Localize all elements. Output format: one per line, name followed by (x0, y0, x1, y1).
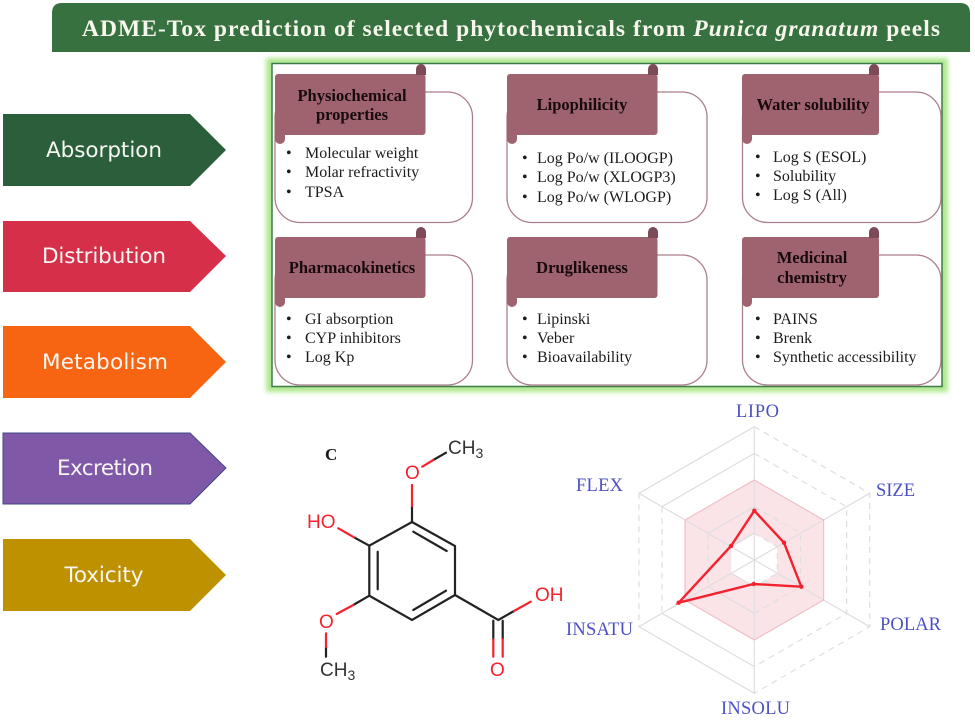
card: Lipophilicity: Lipophilicity (537, 95, 628, 114)
card: Physiochemical properties: Molar refractivity (305, 164, 419, 181)
arrow: Excretion: Excretion (57, 456, 153, 481)
arrow: Toxicity (3, 539, 226, 611)
title banner: ADME-Tox prediction of selected phytochemicals from Punica granatum peels (82, 16, 940, 42)
card: Physiochemical properties: Physiochemical (297, 86, 407, 105)
card: Druglikeness: Veber (537, 330, 575, 347)
card: Pharmacokinetics: • (286, 311, 292, 328)
radar grid (639, 427, 870, 693)
card: Druglikeness: Druglikeness (536, 258, 628, 277)
arrow: Metabolism (3, 326, 226, 398)
radar axis labels (566, 402, 942, 719)
radar axis labels: LIPO (736, 402, 779, 422)
chemical structure: syringic acid (307, 438, 564, 683)
chemical structure: syringic acid: 3 (347, 667, 355, 683)
card: Medicinal chemistry: Brenk (773, 330, 812, 347)
card: Druglikeness: Lipinski (537, 311, 591, 328)
card: Water solubility: • (755, 168, 761, 185)
card: Medicinal chemistry: Medicinal (777, 248, 848, 267)
arrow: Excretion (3, 433, 226, 504)
card: Pharmacokinetics: CYP inhibitors (305, 330, 401, 347)
chemical structure: syringic acid: O (405, 463, 420, 484)
arrow: Toxicity: Toxicity (64, 563, 144, 588)
card: Druglikeness: • (522, 311, 528, 328)
card: Pharmacokinetics (275, 227, 472, 385)
radar data line (676, 508, 804, 605)
panel label: C: C (325, 445, 337, 464)
card: Water solubility: Solubility (773, 168, 836, 185)
card: Medicinal chemistry (742, 227, 941, 385)
card: Water solubility: Water solubility (757, 95, 870, 114)
panel: ADME parameter categories (266, 58, 948, 392)
chemical structure: syringic acid: HO (307, 512, 336, 533)
card: Medicinal chemistry: chemistry (777, 268, 848, 287)
radar axis labels: SIZE (876, 481, 915, 501)
card: Physiochemical properties: • (286, 145, 292, 162)
card: Pharmacokinetics: Log Kp (305, 349, 354, 366)
card: Pharmacokinetics: • (286, 330, 292, 347)
card: Physiochemical properties: • (286, 164, 292, 181)
card: Water solubility: • (755, 149, 761, 166)
card: Medicinal chemistry: • (755, 349, 761, 366)
pink optimal zone (685, 480, 824, 640)
card: Lipophilicity: • (522, 150, 528, 167)
radar axis labels: INSOLU (721, 699, 790, 719)
radar axis labels: INSATU (566, 620, 633, 640)
arrow: Absorption (3, 114, 226, 186)
card: Lipophilicity: Log Po/w (WLOGP) (537, 189, 671, 206)
card: Water solubility: Log S (ESOL) (773, 149, 866, 166)
card: Lipophilicity: • (522, 169, 528, 186)
card: Physiochemical properties (275, 64, 472, 222)
chemical structure: syringic acid: 3 (475, 445, 483, 461)
radar axis labels: POLAR (880, 615, 942, 635)
card: Medicinal chemistry: • (755, 311, 761, 328)
card: Medicinal chemistry: • (755, 330, 761, 347)
arrow: Distribution (3, 221, 226, 292)
card: Lipophilicity: Log Po/w (ILOOGP) (537, 150, 673, 167)
chemical structure: syringic acid: O (490, 660, 505, 681)
card: Lipophilicity: • (522, 189, 528, 206)
card: Medicinal chemistry: PAINS (773, 311, 818, 328)
card: Physiochemical properties: • (286, 184, 292, 201)
card: Physiochemical properties: Molecular weight (305, 145, 419, 162)
radar axis labels: FLEX (576, 476, 624, 496)
card: Pharmacokinetics: • (286, 349, 292, 366)
card: Water solubility: • (755, 187, 761, 204)
chemical structure: syringic acid: O (319, 612, 334, 633)
card: Druglikeness (507, 227, 707, 385)
card: Water solubility: Log S (All) (773, 187, 847, 204)
card: Physiochemical properties: properties (316, 105, 389, 124)
card: Medicinal chemistry: Synthetic accessibility (773, 349, 917, 366)
card: Druglikeness: • (522, 330, 528, 347)
card: Water solubility (742, 64, 941, 222)
title banner (52, 3, 970, 52)
card: Druglikeness: • (522, 349, 528, 366)
card: Physiochemical properties: TPSA (305, 184, 345, 201)
card: Lipophilicity (507, 64, 707, 222)
arrow: Distribution: Distribution (42, 244, 166, 269)
card: Pharmacokinetics: GI absorption (305, 311, 393, 328)
chemical structure: syringic acid: CH (448, 438, 475, 459)
card: Pharmacokinetics: Pharmacokinetics (289, 258, 416, 277)
radar chart: bioavailability (566, 402, 942, 719)
card: Druglikeness: Bioavailability (537, 349, 632, 366)
card: Lipophilicity: Log Po/w (XLOGP3) (537, 169, 676, 186)
arrow: Absorption: Absorption (46, 138, 162, 163)
arrow: Metabolism: Metabolism (42, 350, 168, 375)
chemical structure: syringic acid: CH (320, 660, 347, 681)
chemical structure: syringic acid: OH (535, 585, 564, 606)
